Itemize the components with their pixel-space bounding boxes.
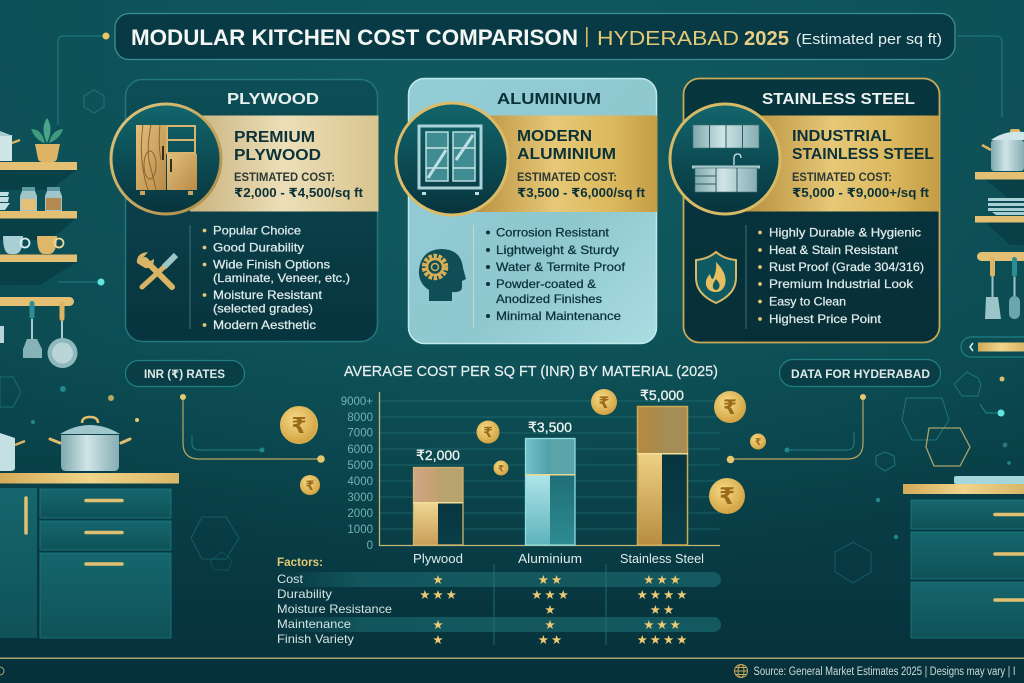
aluminium band text: ALUMINIUM [517, 146, 616, 163]
scattered dots [31, 376, 1011, 539]
bar: stainless steel [637, 406, 688, 545]
grid lines [380, 401, 720, 529]
aluminium band text: MODERN [517, 128, 592, 145]
steel feature list: Rust Proof (Grade 304/316) [769, 260, 924, 274]
star ratings: ★★★★ [637, 587, 689, 602]
aluminium heading: ALUMINIUM [497, 91, 601, 108]
row labels: Durability [277, 587, 332, 601]
y axis labels [341, 396, 373, 552]
pill: data for Hyderabad [780, 360, 940, 386]
plywood band text: ESTIMATED COST: [234, 172, 335, 184]
axes [380, 392, 720, 546]
plywood feature list [203, 224, 350, 332]
pill: INR rates: INR (₹) RATES [144, 369, 225, 381]
cooktop [954, 476, 1024, 484]
steel feature list: Premium Industrial Look [769, 277, 914, 291]
pill: INR rates [126, 360, 244, 386]
y axis labels: 9000+ [341, 396, 373, 408]
cabinet handles [26, 498, 122, 564]
icon: left footer circle [0, 667, 4, 675]
footer rule [0, 658, 1024, 659]
bar: aluminium [525, 438, 575, 545]
category labels [413, 552, 704, 566]
category labels: Aluminium [518, 552, 582, 566]
countertop [903, 484, 1024, 494]
plywood feature list: (Laminate, Veneer, etc.) [213, 271, 350, 285]
icon: plates [988, 198, 1024, 215]
steel band text: ESTIMATED COST: [792, 172, 892, 184]
aluminium price band [470, 116, 658, 212]
category labels: Plywood [413, 552, 463, 566]
row labels: Maintenance [277, 617, 351, 631]
aluminium band text: ₹3,500 - ₹6,000/sq ft [517, 186, 646, 200]
right kitchen counter [903, 476, 1024, 638]
bar values: ₹5,000 [640, 387, 684, 403]
coin [714, 391, 746, 423]
star ratings: ★ [544, 617, 558, 632]
row labels: Factors: [277, 555, 323, 569]
title location: HYDERABAD [597, 28, 739, 50]
aluminium band text [517, 128, 646, 200]
icon: pot on shelf [0, 131, 20, 161]
coin: ₹ [498, 464, 504, 474]
title year: 2025 [744, 28, 789, 50]
coin: ₹ [291, 414, 307, 439]
cabinet door [0, 488, 37, 638]
coin: ₹ [719, 484, 735, 510]
icon: hanging spatula [985, 257, 1001, 319]
title separator [586, 27, 588, 47]
icon: head with gear [419, 249, 466, 301]
y axis labels: 4000 [347, 476, 373, 488]
star ratings: ★★ [538, 572, 564, 587]
plywood badge [111, 104, 221, 214]
divider [473, 225, 474, 328]
icon: potted plant [31, 118, 63, 162]
plywood feature list: Moisture Resistant [213, 288, 323, 302]
icon: cooking pot [50, 417, 130, 471]
coin [280, 406, 318, 444]
factors table [277, 555, 721, 647]
decorative connectors and nodes, top [58, 32, 1002, 286]
plywood feature list: Wide Finish Options [213, 258, 330, 272]
chart title: AVERAGE COST PER SQ FT (INR) BY MATERIAL (2025) [344, 364, 718, 380]
steel feature list: Highly Durable & Hygienic [769, 226, 921, 240]
star ratings: ★★★ [643, 617, 683, 632]
rupee coins [280, 389, 766, 514]
star ratings: ★ [432, 572, 446, 587]
bar values: ₹3,500 [528, 419, 572, 435]
coin [494, 460, 508, 476]
y axis labels: 3000 [347, 492, 373, 504]
plywood price band [190, 116, 378, 212]
aluminium feature list: Anodized Finishes [496, 292, 602, 306]
icon: flame shield [696, 252, 736, 303]
y axis labels: 8000 [347, 412, 373, 424]
star ratings [419, 572, 689, 647]
plywood feature list: (selected grades) [213, 302, 313, 316]
steel band text: ₹5,000 - ₹9,000+/sq ft [792, 186, 930, 200]
coin: ₹ [598, 393, 610, 412]
aluminium feature list: Corrosion Resistant [496, 226, 610, 240]
aluminium badge [396, 103, 508, 215]
plywood band text: ₹2,000 - ₹4,500/sq ft [234, 186, 364, 200]
footer [0, 664, 1016, 678]
steel feature list [758, 226, 924, 326]
shelf shadows [985, 179, 1024, 245]
plywood band text: PREMIUM [234, 129, 315, 146]
shelves [975, 172, 1024, 222]
row labels [277, 555, 392, 646]
right wall shelves [961, 129, 1024, 357]
plywood band text [234, 129, 364, 200]
bar values: ₹2,000 [416, 447, 460, 463]
cabinet drawers [911, 500, 1024, 638]
small hanging item [0, 326, 4, 343]
panel: aluminium [396, 78, 658, 344]
row labels: Cost [277, 572, 304, 586]
coin [591, 389, 617, 415]
steel price band [745, 116, 939, 212]
divider [746, 225, 747, 329]
hexagon decoration [0, 90, 981, 583]
aluminium feature list: Water & Termite Proof [496, 260, 626, 274]
star ratings: ★★★ [643, 572, 683, 587]
row labels: Finish Variety [277, 632, 354, 646]
plywood feature list: Popular Choice [213, 224, 301, 238]
icon: cooking pot left [0, 433, 25, 471]
hanging rail [977, 252, 1024, 261]
coin: ₹ [723, 395, 737, 419]
star ratings: ★ [432, 617, 446, 632]
aluminium feature list: Powder-coated & [496, 277, 596, 291]
connector: left [180, 394, 325, 463]
y axis labels: 1000 [347, 524, 373, 536]
icon: spice jars [20, 187, 62, 211]
countertop [0, 473, 179, 484]
steel band text [792, 128, 934, 200]
aluminium band text: ESTIMATED COST: [517, 172, 617, 184]
star ratings: ★★ [650, 602, 676, 617]
bar: plywood [413, 467, 463, 545]
star ratings: ★★★★ [637, 632, 689, 647]
steel feature list: Easy to Clean [769, 294, 846, 308]
y axis labels: 7000 [347, 428, 373, 440]
star ratings: ★★★ [419, 587, 459, 602]
y axis labels: 0 [367, 540, 373, 552]
divider [190, 225, 191, 329]
panel: stainless steel [670, 78, 940, 342]
icon: bowls [0, 192, 10, 210]
coin: ₹ [305, 479, 315, 494]
pill: data for Hyderabad: DATA FOR HYDERABAD [791, 369, 930, 381]
icon: wrench and screwdriver [137, 252, 176, 287]
title note: (Estimated per sq ft) [796, 32, 942, 48]
plywood band text: PLYWOOD [234, 147, 321, 164]
column dividers [494, 564, 606, 645]
towel rail pill [961, 337, 1024, 357]
aluminium feature list [486, 226, 626, 323]
connector: right [727, 394, 866, 463]
steel feature list: Highest Price Point [769, 312, 882, 326]
steel heading: STAINLESS STEEL [762, 91, 915, 108]
icon: globe [734, 664, 748, 678]
icon: cups [3, 236, 64, 254]
row labels: Moisture Resistance [277, 602, 392, 616]
star ratings: ★ [432, 632, 446, 647]
highlighted rows [277, 572, 721, 587]
cabinet drawers [40, 489, 171, 638]
coin [476, 420, 500, 444]
bar values [416, 387, 684, 463]
left kitchen counter [0, 417, 179, 638]
category labels: Stainless Steel [620, 552, 704, 566]
y axis labels: 6000 [347, 444, 373, 456]
steel band text: INDUSTRIAL [792, 128, 892, 145]
shelves [0, 162, 77, 262]
hanging rail [0, 297, 74, 306]
plywood feature list: Good Durability [213, 240, 304, 254]
coin: ₹ [755, 437, 762, 448]
icon: pot on shelf [982, 129, 1024, 171]
steel feature list: Heat & Stain Resistant [769, 243, 899, 257]
icon: hanging spatula [23, 301, 42, 358]
left wall shelves [0, 118, 78, 368]
cabinet handles [995, 514, 1024, 600]
coin [300, 475, 320, 495]
coin [709, 478, 745, 514]
y axis labels: 2000 [347, 508, 373, 520]
steel badge [670, 104, 780, 214]
icon: hanging spoon [1009, 257, 1020, 319]
star ratings: ★★ [538, 632, 564, 647]
y axis labels: 5000 [347, 460, 373, 472]
coin: ₹ [483, 425, 493, 441]
star ratings: ★ [544, 602, 558, 617]
plywood heading: PLYWOOD [227, 91, 319, 108]
title text: MODULAR KITCHEN COST COMPARISON [131, 25, 578, 50]
star ratings: ★★★ [531, 587, 571, 602]
icon: hanging pan [48, 301, 78, 368]
aluminium feature list: Minimal Maintenance [496, 309, 621, 323]
steel band text: STAINLESS STEEL [792, 146, 934, 163]
plywood feature list: Modern Aesthetic [213, 318, 316, 332]
aluminium feature list: Lightweight & Sturdy [496, 243, 619, 257]
panel: plywood [111, 80, 378, 342]
title banner [115, 14, 955, 60]
bar chart [341, 387, 720, 566]
coin [750, 434, 766, 450]
shelf shadows [0, 170, 77, 285]
